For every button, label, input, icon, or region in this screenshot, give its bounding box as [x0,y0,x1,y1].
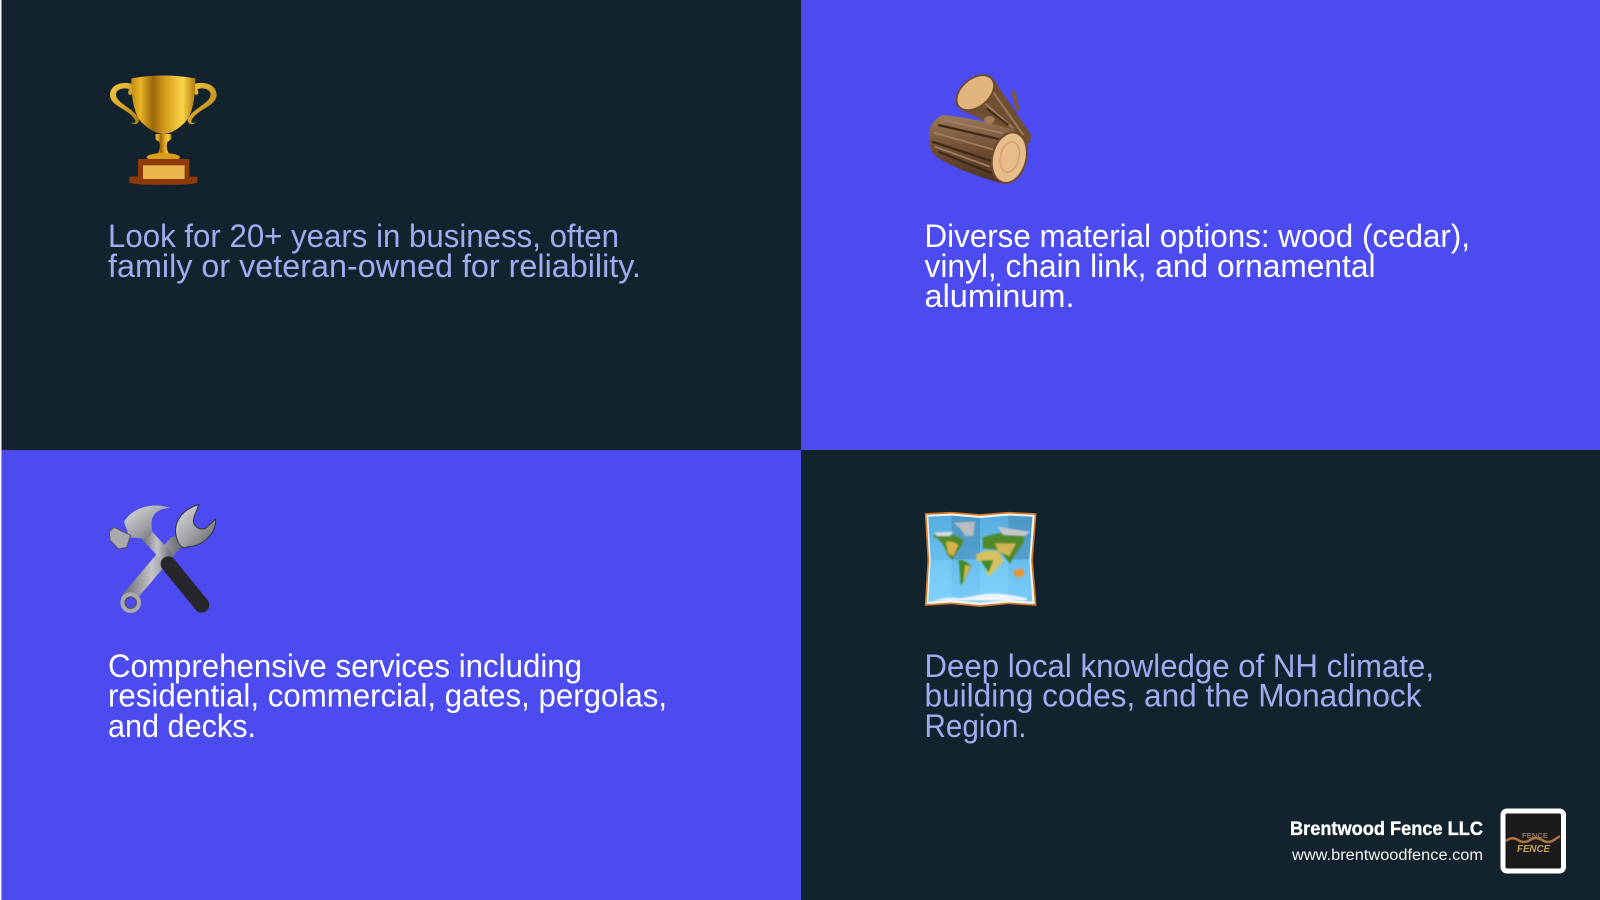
panel: experience [2,0,801,450]
text: services [108,648,667,744]
brand footer [1290,811,1564,871]
icon: trophy [110,75,217,185]
text: local knowledge: building codes, and the Monadnock [924,678,1422,714]
icon: world map [926,513,1036,606]
icon: hammer and wrench [109,505,216,613]
text: services: and decks. [108,708,256,744]
text: materials [924,218,1470,314]
logo [1503,811,1564,871]
brand name: Brentwood Fence LLC [1290,819,1483,840]
text: experience: family or veteran-owned for reliability. [108,248,641,284]
panel: materials [801,0,1600,450]
text: services: residential, commercial, gates, pergolas, [108,678,667,714]
text: local knowledge: Deep local knowledge of NH climate, [924,648,1434,684]
text: experience: Look for 20+ years in business, often [108,218,619,254]
text: materials: Diverse material options: wood (cedar), [924,218,1470,254]
text: materials: aluminum. [924,278,1074,314]
panel: local knowledge [801,450,1600,900]
logo: FENCE [1517,844,1550,855]
text: experience [108,218,641,284]
text: services: Comprehensive services including [108,648,582,684]
icon: logs [929,67,1033,188]
panel: services [2,450,801,900]
text: materials: vinyl, chain link, and ornamental [924,248,1376,284]
text: local knowledge [924,648,1434,744]
website: www.brentwoodfence.com [1291,847,1483,864]
text: local knowledge: Region. [924,708,1026,744]
logo: FENCE [1522,833,1548,840]
